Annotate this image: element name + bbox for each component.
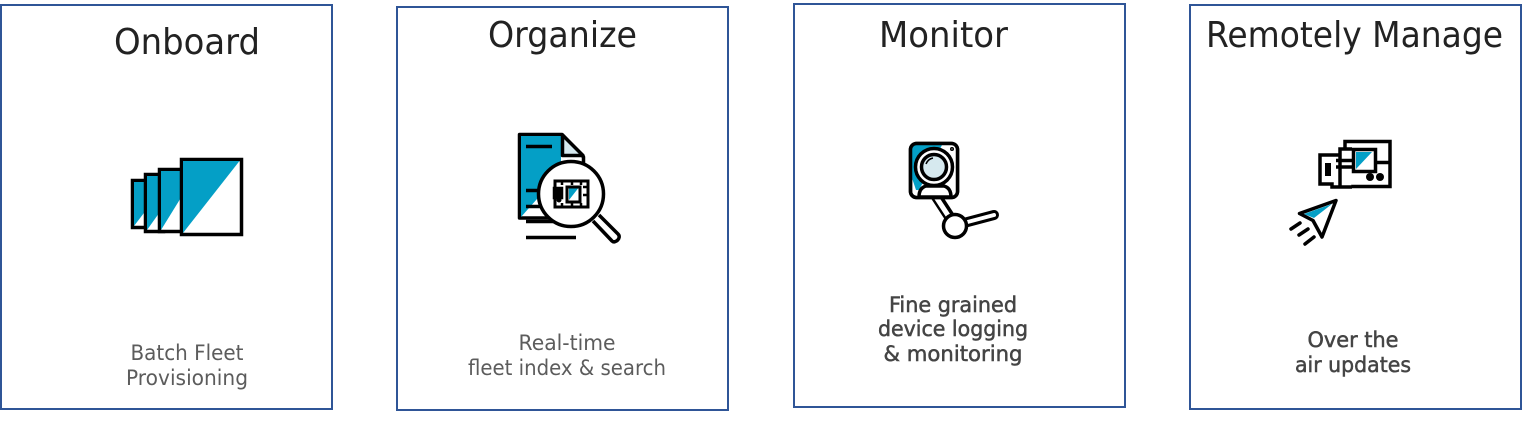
text: real-time fleet index and search: Real-time: [518, 331, 616, 355]
text: fine grained device logging and monitoring: Fine grained: [889, 293, 1017, 317]
heading: onboard: Onboard: [114, 22, 260, 63]
panel: organize: [397, 7, 728, 410]
icon: devices and paper plane: [1291, 142, 1391, 244]
text: fine grained device logging and monitoring: device logging: [878, 317, 1028, 341]
text: batch fleet provisioning: Provisioning: [126, 366, 248, 390]
panel: monitor: [794, 4, 1125, 407]
panel: onboard: [1, 5, 332, 409]
heading: organize: Organize: [488, 15, 637, 56]
text: batch fleet provisioning: Batch Fleet: [130, 341, 244, 365]
text: over the air updates: Over the: [1308, 328, 1398, 352]
icon: document with magnifier: [520, 134, 619, 242]
heading: monitor: Monitor: [879, 15, 1008, 56]
text: over the air updates: air updates: [1295, 353, 1411, 377]
heading: remotely manage: Remotely Manage: [1206, 15, 1503, 56]
text: real-time fleet index and search: fleet index & search: [468, 356, 666, 380]
text: fine grained device logging and monitoring: & monitoring: [884, 342, 1022, 366]
icon: camera on arm: [910, 144, 994, 238]
panel: remotely manage: [1190, 5, 1521, 409]
icon: stacked cards: [132, 160, 242, 234]
